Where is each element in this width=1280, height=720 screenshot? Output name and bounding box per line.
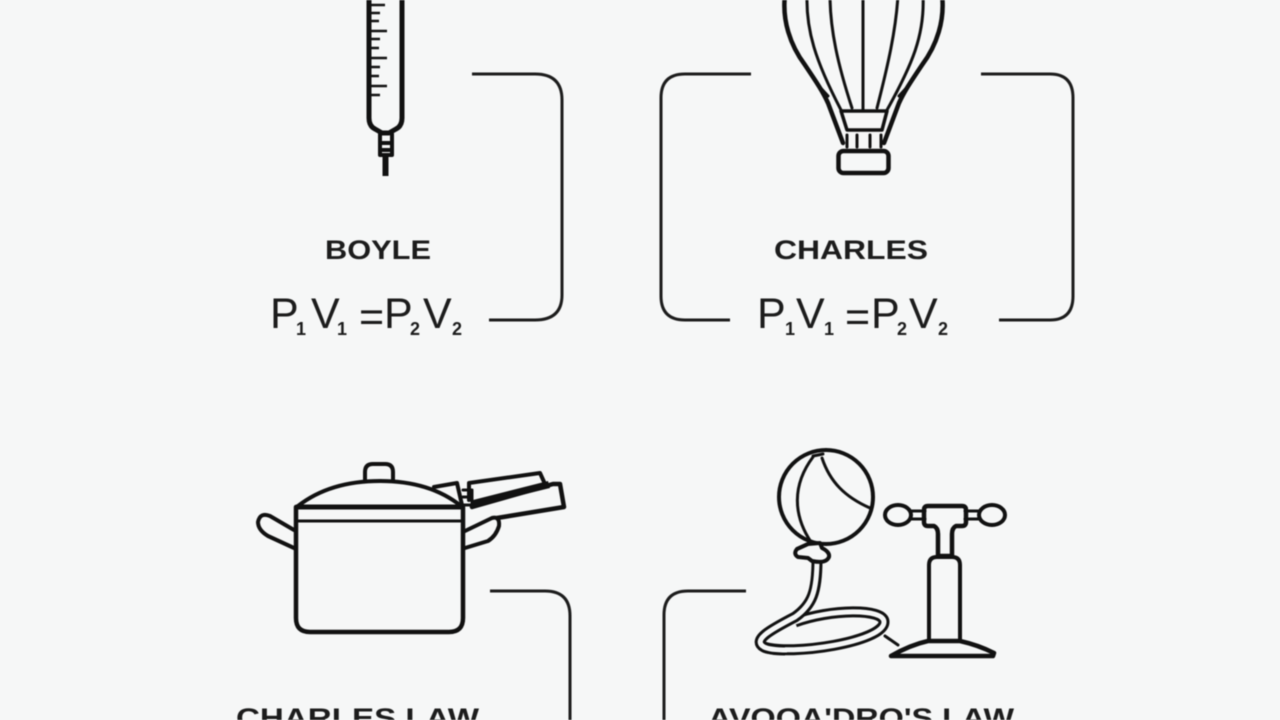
- icon: hot air balloon: [784, 0, 943, 173]
- panel: Boyle: [270, 0, 562, 341]
- formula: Charles: 1122: [785, 319, 948, 339]
- formula: Boyle: PV=PV: [270, 290, 452, 341]
- bracket: Avogadro frame: [664, 591, 746, 720]
- bracket: Charles law frame: [490, 591, 570, 720]
- icon: pressure cooker: [258, 464, 564, 632]
- icon: syringe: [369, 0, 402, 176]
- heading: Boyle: BOYLE: [325, 235, 431, 265]
- formula: Boyle: 1122: [296, 319, 462, 339]
- icon: ball and pump: [760, 450, 1005, 656]
- formula: Charles: PV=PV: [757, 290, 938, 341]
- bracket: Boyle frame: [472, 74, 562, 320]
- panel: Charles law: [236, 464, 570, 720]
- bracket: Charles right: [981, 74, 1073, 320]
- bracket: Charles left: [661, 74, 751, 320]
- heading: Charles: CHARLES: [774, 235, 928, 265]
- panel: Avogadro's law: [664, 450, 1015, 720]
- panel: Charles: [661, 0, 1073, 341]
